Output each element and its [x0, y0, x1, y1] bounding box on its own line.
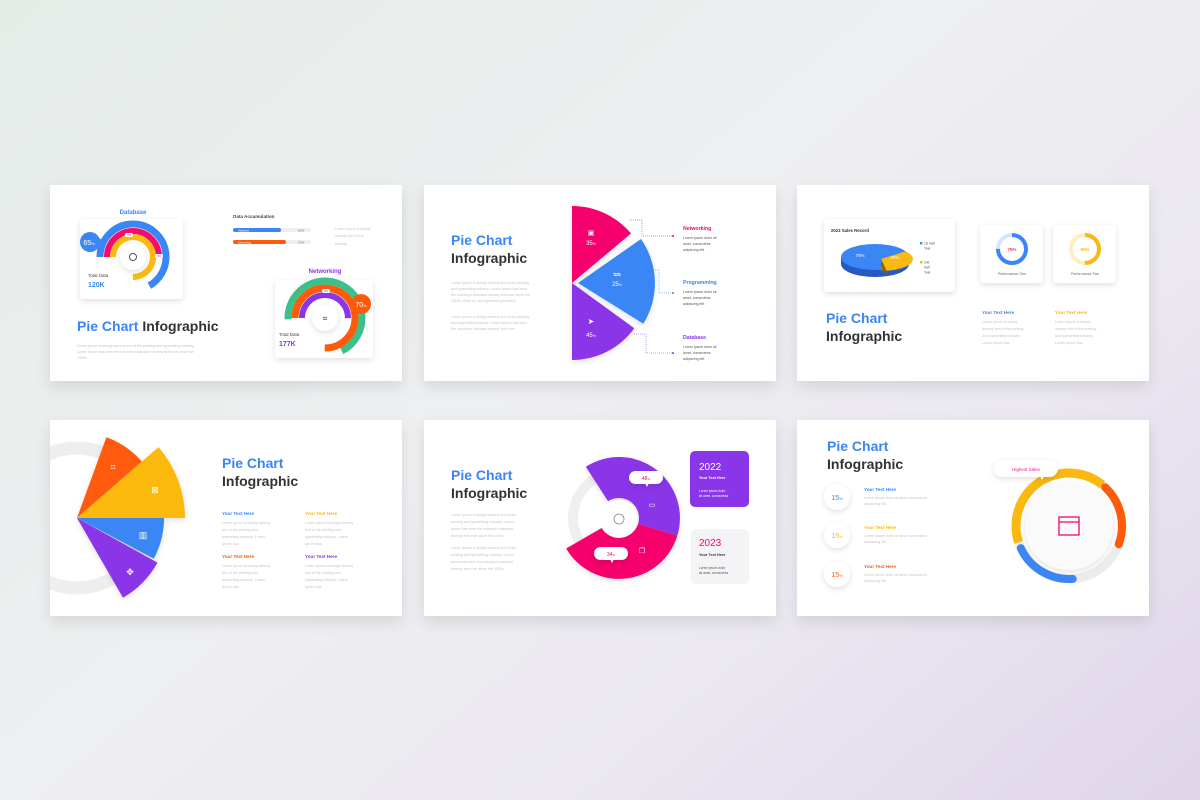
text block yellow: ipsum has	[305, 542, 322, 546]
card: performance one	[980, 225, 1043, 283]
card: performance two: 50%	[1080, 247, 1090, 252]
card: database	[80, 219, 183, 299]
list item 3	[824, 561, 928, 587]
label: programming	[683, 280, 717, 306]
chart: half pie	[572, 206, 655, 360]
slide 5: 2022 vs 2023 donut	[424, 420, 776, 616]
text block yellow: text of the printing and	[305, 528, 341, 532]
text block blue: Lorem ipsum has	[982, 341, 1010, 345]
bubble: 48%: 48%	[642, 476, 650, 482]
chart: database donut: 5%	[157, 255, 162, 258]
chart: fan wedges	[77, 437, 185, 598]
text block yellow: Lorem ipsum has	[1055, 341, 1083, 345]
list item 1: 15%	[831, 495, 843, 502]
title: Pie Chart	[827, 438, 889, 454]
list item 1: Your Text Here	[864, 487, 896, 492]
text block yellow: and typesetting industry.	[1055, 334, 1094, 338]
body text: dummy text ever since the 1500s.	[451, 534, 505, 538]
card: 2022: sit amet, consectetur	[699, 494, 729, 498]
chart: half pie: 25%	[612, 282, 622, 288]
list item 2: Your Text Here	[864, 525, 896, 530]
card: performance one: 75%	[1007, 247, 1017, 252]
card: 2023: Lorem ipsum dolor	[699, 566, 726, 570]
chart: half pie: 35%	[586, 241, 596, 247]
text block purple: typesetting industry. Lorem	[305, 578, 348, 582]
text block blue: Your Text Here	[982, 310, 1014, 315]
text block orange: ipsum has	[222, 585, 239, 589]
body text: Lorem ipsum is simply dummy text of the	[451, 546, 516, 550]
total data 177K: 177K	[279, 341, 296, 348]
card: 2023	[691, 529, 749, 584]
total data 177K	[279, 332, 300, 348]
title: Pie Chart	[222, 455, 284, 471]
title	[222, 455, 298, 489]
list item 3: adipiscing elit.	[864, 579, 887, 583]
list item 2: 15%	[831, 533, 843, 540]
total data 120K: 120K	[88, 282, 105, 289]
chart: 3D pie: 2nd	[924, 260, 930, 264]
card: 2022: 2022	[699, 462, 722, 473]
bar chart: data accumulation: Database	[238, 228, 250, 232]
text block orange	[222, 554, 271, 589]
text block yellow	[305, 511, 354, 546]
body text: and typesetting industry. Lorem ipsum has been	[451, 321, 527, 325]
label: programming: adipiscing elit.	[683, 302, 705, 306]
chart: 3D pie: 1st Half	[924, 242, 935, 246]
label: networking: Networking	[683, 226, 711, 232]
title	[826, 310, 902, 344]
body text	[77, 344, 195, 360]
chart: donut: ▭	[649, 502, 655, 509]
bar chart: data accumulation: Networking	[238, 240, 252, 244]
slide 2: exploded half pie	[424, 185, 776, 381]
chart: networking donut: ⌗	[323, 314, 328, 323]
bar chart: data accumulation: printing	[335, 242, 347, 246]
card: 2022	[690, 451, 749, 507]
title	[827, 438, 903, 472]
badge: 65%	[80, 232, 104, 252]
label: networking: Lorem ipsum dolor sit	[683, 236, 716, 240]
slide 1: dual donut charts	[50, 185, 402, 381]
body text: the industry's standard dummy text ever since the	[451, 293, 530, 297]
list item 3: Your Text Here	[864, 564, 896, 569]
callout: highest sales	[994, 460, 1058, 480]
body text: 1500s, when an and typesetting industry.	[451, 299, 516, 303]
text block yellow: Lorem ipsum is simply dummy	[305, 521, 354, 525]
card: 2023: 2023	[699, 538, 722, 549]
chart: half pie: ➤	[588, 317, 595, 326]
text block orange: typesetting industry. Lorem	[222, 578, 265, 582]
text block blue	[222, 511, 271, 546]
text block blue: Lorem ipsum is simply	[982, 320, 1018, 324]
title: Pie Chart	[451, 467, 513, 483]
chart: database donut	[100, 224, 166, 290]
title: Infographic	[827, 456, 903, 472]
text block yellow	[1055, 310, 1096, 345]
card: 2023: sit amet, consectetur	[699, 571, 729, 575]
text block purple: ipsum has	[305, 585, 322, 589]
card: performance two	[1053, 225, 1116, 283]
chart: fan wedges: ⌗	[110, 462, 116, 472]
card: performance two: Performance Two	[1071, 272, 1099, 276]
bar chart: data accumulation: 70%	[298, 240, 304, 244]
connectors	[629, 220, 673, 353]
card: 2022: Lorem ipsum dolor	[699, 489, 726, 493]
text block blue: Lorem ipsum is simply dummy	[222, 521, 271, 525]
text block yellow: Your Text Here	[1055, 310, 1087, 315]
text block orange: text of the printing and	[222, 571, 258, 575]
body text: printing and typesetting industry. Lorem	[451, 520, 514, 524]
label: networking	[683, 226, 716, 252]
text block blue: ipsum has	[222, 542, 239, 546]
label: networking: adipiscing elit.	[683, 248, 705, 252]
badge: 70%: 70%	[355, 302, 367, 309]
card: performance one: Performance One	[998, 272, 1026, 276]
title	[451, 467, 527, 501]
chart: 3D pie	[831, 228, 935, 277]
title: Pie Chart	[451, 232, 513, 248]
bar chart: data accumulation	[233, 214, 371, 246]
body text: 1500s	[77, 356, 87, 360]
slide 6: ring chart with list	[797, 420, 1149, 616]
chart: database donut: 8%	[127, 234, 132, 237]
list item 2	[824, 522, 928, 548]
label: database: amet, consectetur	[683, 351, 712, 355]
total data 120K: Total Data	[88, 273, 109, 278]
title: Infographic	[222, 473, 298, 489]
chart: donut	[566, 457, 680, 579]
decorative ring	[7, 448, 147, 588]
body text: ipsum has been the industry's standard	[451, 560, 513, 564]
label: networking: amet, consectetur	[683, 242, 712, 246]
chart: fan wedges: ⊠	[151, 485, 159, 495]
body text: ipsum has been the industry's standard	[451, 527, 513, 531]
body text: Lorem ipsum has been the industry's standard dummy text ever since the	[77, 350, 194, 354]
body text: Lorem ipsum is simply dummy text of the printing	[451, 281, 529, 285]
chart: 3D pie: 50%	[890, 255, 900, 260]
label: programming: Lorem ipsum dolor sit	[683, 290, 716, 294]
total data 177K: Total Data	[279, 332, 300, 337]
chart: ring	[994, 451, 1144, 601]
list item 3: 15%	[831, 572, 843, 579]
title: Infographic	[451, 250, 527, 266]
text block yellow: dummy text of the printing	[1055, 327, 1096, 331]
bubble: 34%: 34%	[607, 552, 615, 558]
chart: 3D pie: Half	[924, 266, 930, 270]
list item 1: adipiscing elit.	[864, 502, 887, 506]
chart: 3D pie: Year	[924, 246, 931, 250]
title: Pie Chart	[826, 310, 888, 326]
list item 1	[824, 484, 928, 510]
list item 1: Lorem ipsum dolor sit amet consectetur	[864, 496, 928, 500]
badge: 70%	[347, 294, 371, 314]
body text: Lorem ipsum is simply dummy text of the printing and typesetting industry.	[77, 344, 195, 348]
label: database: Database	[683, 335, 706, 341]
chart: donut: ❐	[639, 547, 645, 555]
chart: fan wedges: ▥	[139, 530, 147, 540]
body text	[451, 513, 516, 571]
text block blue: dummy text of the printing	[982, 327, 1023, 331]
body text: Lorem ipsum is simply dummy text of the printing	[451, 315, 529, 319]
body text: dummy text ever since the 1500s.	[451, 567, 505, 571]
chart: half pie: ᴓᴓ	[613, 272, 621, 278]
text block blue: typesetting industry. Lorem	[222, 535, 265, 539]
bar chart: data accumulation: 60%	[298, 228, 304, 232]
bar chart: data accumulation: Data Accumulation	[233, 214, 275, 219]
bar chart: data accumulation: Lorem ipsum is simply	[335, 227, 371, 231]
label: database: adipiscing elit.	[683, 357, 705, 361]
title: Infographic	[826, 328, 902, 344]
text block orange: Your Text Here	[222, 554, 254, 559]
body text: printing and typesetting industry. Lorem	[451, 553, 514, 557]
chart: 3D pie: 75%	[855, 253, 865, 258]
list item 2: adipiscing elit.	[864, 540, 887, 544]
bubble: 48%	[629, 471, 663, 487]
list item 3: Lorem ipsum dolor sit amet consectetur	[864, 573, 928, 577]
text block orange: Lorem ipsum is simply dummy	[222, 564, 271, 568]
bar chart: data accumulation: dummy text of the	[335, 234, 364, 238]
label: programming: amet, consectetur	[683, 296, 712, 300]
card: 2022: Your Text Here	[699, 476, 725, 480]
chart: 3D pie: Year	[924, 270, 931, 274]
text block blue: and typesetting industry.	[982, 334, 1021, 338]
chart: networking donut: 8%	[324, 290, 329, 293]
chart: networking donut	[287, 280, 363, 356]
slide 4: fan pie	[50, 420, 402, 616]
card: 2023: Your Text Here	[699, 553, 725, 557]
body text: Lorem ipsum is simply dummy text of the	[451, 513, 516, 517]
text block yellow: Lorem ipsum is simply	[1055, 320, 1091, 324]
callout: highest sales: Highest Sales	[1012, 467, 1041, 472]
text block blue: Your Text Here	[222, 511, 254, 516]
slide 3: 3D pie and performance donuts	[797, 185, 1149, 381]
text block blue	[982, 310, 1023, 345]
title: Pie Chart Infographic	[77, 318, 219, 334]
text block purple: Your Text Here	[305, 554, 337, 559]
chart: 3D pie: 2023 Sales Record	[831, 228, 869, 233]
text block yellow: Your Text Here	[305, 511, 337, 516]
body text: the industry's standard dummy text ever	[451, 327, 515, 331]
title	[451, 232, 527, 266]
chart: fan wedges: ✥	[126, 567, 134, 577]
icon: window	[1059, 517, 1079, 535]
chart: half pie: ▣	[588, 230, 594, 237]
body text	[451, 281, 530, 331]
total data 120K	[88, 273, 109, 289]
bubble: 34%	[594, 547, 628, 563]
title: Infographic	[451, 485, 527, 501]
text block blue: text of the printing and	[222, 528, 258, 532]
card: sales record	[824, 219, 955, 292]
chart: networking donut: 5%	[296, 290, 300, 293]
body text: and typesetting industry. Lorem ipsum has been	[451, 287, 527, 291]
label: database	[683, 335, 716, 361]
chart: half pie: 45%	[586, 333, 596, 339]
text block purple	[305, 554, 354, 589]
label: database: Lorem ipsum dolor sit	[683, 345, 716, 349]
badge: 65%: 65%	[83, 240, 95, 247]
text block purple: text of the printing and	[305, 571, 341, 575]
text block yellow: typesetting industry. Lorem	[305, 535, 348, 539]
heading: networking: Networking	[309, 269, 342, 275]
card: networking	[275, 280, 373, 358]
label: programming: Programming	[683, 280, 717, 286]
text block purple: Lorem ipsum is simply dummy	[305, 564, 354, 568]
list item 2: Lorem ipsum dolor sit amet consectetur	[864, 534, 928, 538]
heading: database: Database	[120, 210, 147, 216]
